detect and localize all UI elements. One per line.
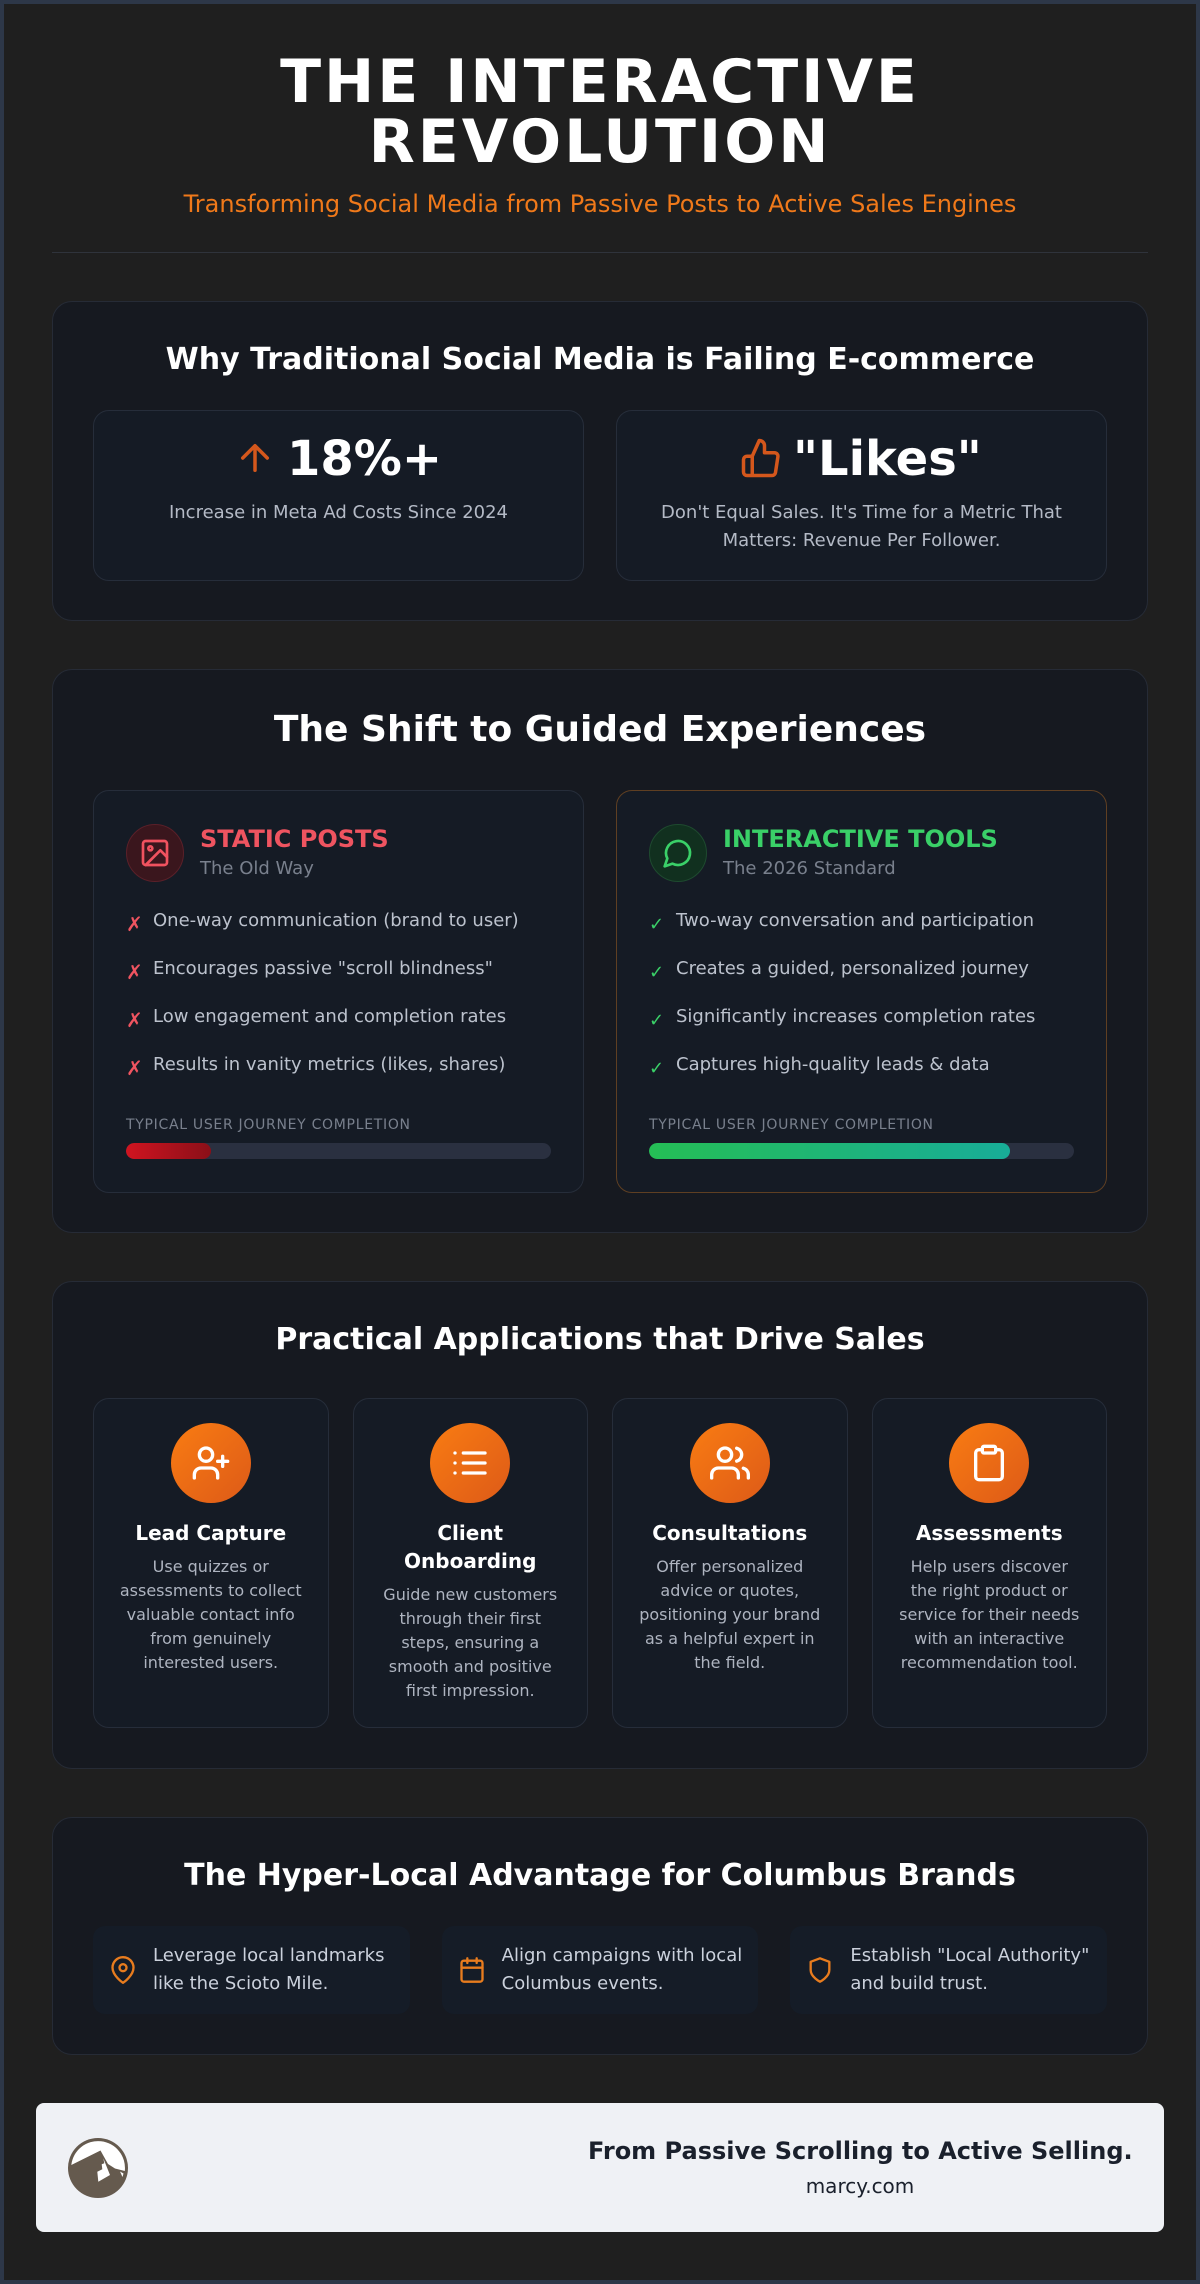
description: through their first [399, 1609, 541, 1628]
list: benefits: ✓ [649, 914, 664, 935]
description: smooth and positive [389, 1657, 552, 1676]
icon: list [430, 1423, 510, 1503]
title: Onboarding [404, 1549, 536, 1573]
list: benefits: Creates a guided, personalized journey [676, 958, 1029, 979]
text: like the Scioto Mile. [153, 1973, 328, 1994]
text: and build trust. [850, 1973, 988, 1994]
text [153, 1945, 384, 1994]
title: Lead Capture [135, 1521, 286, 1545]
header: title and subtitle [184, 47, 1016, 218]
stat description [661, 502, 1062, 551]
comparison card: interactive tools [616, 790, 1107, 1193]
progress: journey completion 20% [126, 1117, 551, 1159]
list: benefits: ✓ [649, 1058, 664, 1079]
heading: The Hyper-Local Advantage for Columbus Brands [184, 1858, 1016, 1893]
heading: The Shift to Guided Experiences [274, 709, 926, 750]
application card: client onboarding [352, 1398, 588, 1728]
list: benefits [649, 910, 1035, 1079]
item: local landmarks [93, 1926, 410, 2014]
heading: Practical Applications that Drive Sales [275, 1322, 925, 1357]
application card: consultations [612, 1398, 848, 1728]
progress: journey completion 20%: TYPICAL USER JOURNEY COMPLETION [126, 1117, 411, 1133]
title: Assessments [916, 1521, 1063, 1545]
list: drawbacks: ✗ [126, 1008, 143, 1032]
heading: Why Traditional Social Media is Failing E-commerce [166, 342, 1034, 377]
description: recommendation tool. [901, 1653, 1078, 1672]
description: steps, ensuring a [401, 1633, 539, 1652]
description: Help users discover [911, 1557, 1068, 1576]
icon: clipboard [949, 1423, 1029, 1503]
list: benefits: Captures high-quality leads & data [676, 1054, 990, 1075]
list: benefits: ✓ [649, 962, 664, 983]
icon: arrow up [240, 444, 270, 472]
description [899, 1557, 1079, 1672]
progress: journey completion 85% [649, 1117, 1074, 1159]
panel: the shift to guided experiences [52, 669, 1148, 1233]
text: Leverage local landmarks [153, 1945, 384, 1966]
title: Consultations [652, 1521, 807, 1545]
card subtitle: The Old Way [200, 858, 314, 879]
description: service for their needs [899, 1605, 1079, 1624]
text: Align campaigns with local [502, 1945, 742, 1966]
panel: hyper-local advantage [52, 1817, 1148, 2055]
icon: users [690, 1423, 770, 1503]
icon: thumbs up [742, 438, 780, 478]
description: first impression. [406, 1681, 535, 1700]
text: Columbus events. [502, 1973, 663, 1994]
panel: why traditional social media is failing [52, 301, 1148, 621]
panel: practical applications [52, 1281, 1148, 1769]
list: drawbacks: ✗ [126, 1056, 143, 1080]
stat value: "Likes" [793, 431, 982, 487]
icon: calendar [460, 1957, 484, 1983]
text: Establish "Local Authority" [850, 1945, 1089, 1966]
stat card: likes [616, 410, 1107, 581]
list: drawbacks: ✗ [126, 912, 143, 936]
description: as a helpful expert in [645, 1629, 815, 1648]
icon: user plus [171, 1423, 251, 1503]
text [502, 1945, 742, 1994]
stat value: 18%+ [287, 431, 442, 487]
icon: map pin [111, 1956, 135, 1984]
description: interested users. [143, 1653, 278, 1672]
list: drawbacks: ✗ [126, 960, 143, 984]
stat description: Don't Equal Sales. It's Time for a Metric That [661, 502, 1062, 523]
description: from genuinely [150, 1629, 271, 1648]
icon: shield [810, 1957, 830, 1983]
description: Offer personalized [656, 1557, 803, 1576]
list: benefits: ✓ [649, 1010, 664, 1031]
card subtitle: The 2026 Standard [723, 858, 896, 879]
list: drawbacks: Low engagement and completion rates [153, 1006, 506, 1027]
description: advice or quotes, [660, 1581, 799, 1600]
title: Client [437, 1521, 503, 1545]
list: benefits: Significantly increases completion rates [676, 1006, 1035, 1027]
list: benefits: Two-way conversation and participation [676, 910, 1034, 931]
subtitle: Transforming Social Media from Passive Posts to Active Sales Engines [184, 190, 1016, 218]
title: REVOLUTION [369, 107, 831, 177]
tagline: From Passive Scrolling to Active Selling. [588, 2137, 1133, 2165]
list: drawbacks [126, 910, 519, 1080]
website: marcy.com [806, 2174, 914, 2198]
stat card: meta ad costs [93, 410, 584, 581]
comparison card: static posts [93, 790, 584, 1193]
progress: journey completion 85%: TYPICAL USER JOURNEY COMPLETION [649, 1117, 934, 1133]
description: assessments to collect [120, 1581, 302, 1600]
application card: lead capture [93, 1398, 328, 1728]
title: THE INTERACTIVE [280, 47, 920, 117]
description: Guide new customers [383, 1585, 557, 1604]
list: drawbacks: One-way communication (brand to user) [153, 910, 519, 931]
stat description: Matters: Revenue Per Follower. [723, 530, 1000, 551]
description [639, 1557, 820, 1672]
list: drawbacks: Encourages passive "scroll blindness" [153, 958, 493, 979]
description: positioning your brand [639, 1605, 820, 1624]
item: local events [442, 1926, 758, 2014]
logo: mountain in circle [68, 2138, 128, 2198]
card title: INTERACTIVE TOOLS [723, 825, 998, 853]
icon: message in green circle [649, 824, 707, 882]
stat description: Increase in Meta Ad Costs Since 2024 [169, 502, 508, 523]
title [280, 47, 920, 177]
text [850, 1945, 1089, 1994]
description: Use quizzes or [153, 1557, 269, 1576]
description [120, 1557, 302, 1672]
item: local authority [790, 1926, 1107, 2014]
application card: assessments [872, 1398, 1107, 1728]
card title: STATIC POSTS [200, 825, 389, 853]
description [383, 1585, 557, 1700]
title [404, 1521, 536, 1573]
description: with an interactive [914, 1629, 1064, 1648]
list: drawbacks: Results in vanity metrics (likes, shares) [153, 1054, 505, 1075]
footer text [588, 2137, 1133, 2198]
description: the field. [694, 1653, 765, 1672]
description: the right product or [911, 1581, 1068, 1600]
icon: image in red circle [126, 824, 184, 882]
description: valuable contact info [127, 1605, 295, 1624]
footer banner [36, 2103, 1164, 2232]
